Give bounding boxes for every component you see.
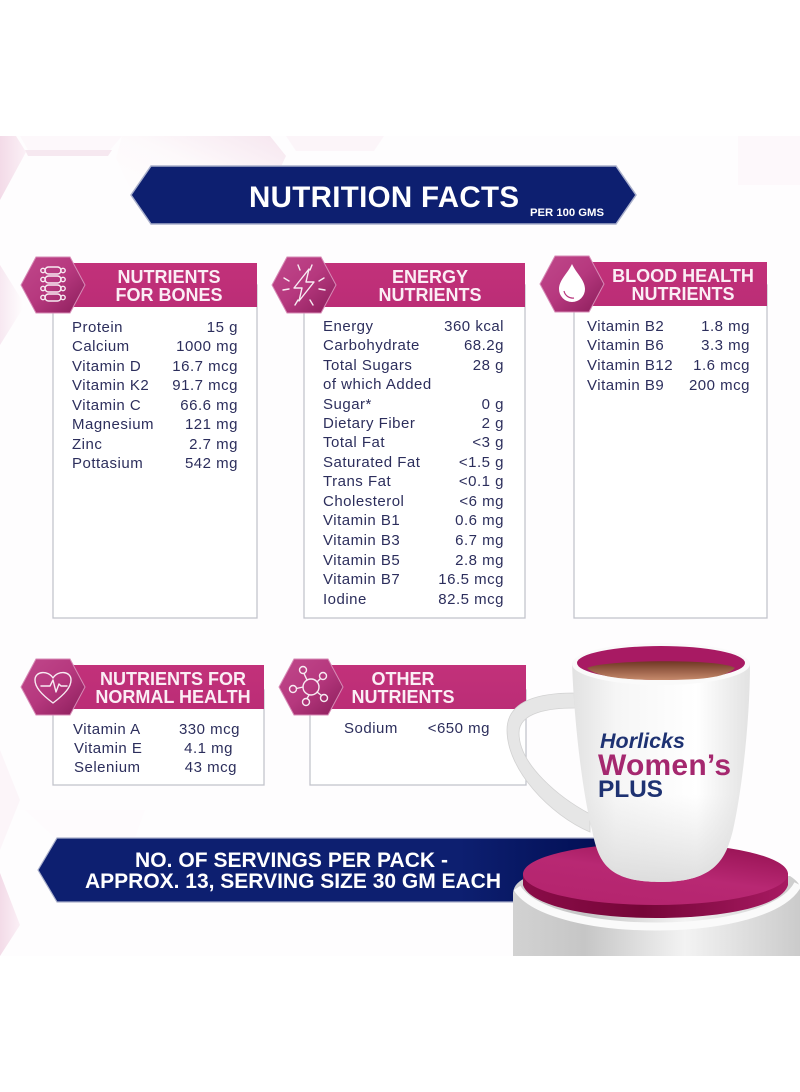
nutrient rows: normal health — [73, 721, 240, 776]
nutrient rows: blood health: 1.6 mcg — [693, 357, 750, 374]
nutrient rows: normal health: Vitamin A — [73, 721, 141, 738]
nutrient rows: normal health: 4.1 mg — [184, 740, 233, 757]
nutrient rows: blood health: 3.3 mg — [701, 337, 750, 354]
icon: spine — [21, 257, 85, 313]
nutrient rows: bones: 91.7 mcg — [172, 377, 238, 394]
heading: other nutrients: OTHER — [372, 669, 435, 689]
nutrient rows: blood health: Vitamin B2 — [587, 318, 664, 335]
nutrient rows: energy: Energy — [323, 318, 374, 335]
nutrient rows: energy: Trans Fat — [323, 473, 391, 490]
mug logo: PLUS — [598, 776, 663, 803]
nutrient rows: energy: 2.8 mg — [455, 552, 504, 569]
servings text: APPROX. 13, SERVING SIZE 30 GM EACH — [85, 870, 501, 893]
nutrient rows: energy: Vitamin B3 — [323, 532, 400, 549]
nutrient rows: energy: Vitamin B7 — [323, 571, 400, 588]
nutrient rows: energy: 2 g — [482, 415, 504, 432]
nutrient rows: energy: 16.5 mcg — [438, 571, 504, 588]
nutrient rows: energy: 0 g — [482, 396, 504, 413]
panel: other nutrients — [279, 659, 526, 785]
nutrient rows: other: <650 mg — [428, 720, 490, 737]
mug handle — [507, 693, 590, 832]
nutrient rows: energy: <1.5 g — [459, 454, 504, 471]
pedestal — [513, 843, 800, 956]
nutrient rows: energy: Vitamin B5 — [323, 552, 400, 569]
heading: nutrients for normal health: NUTRIENTS FOR — [100, 669, 246, 689]
panel: blood health nutrients — [540, 256, 767, 618]
mug logo: Horlicks — [600, 729, 685, 753]
nutrient rows: energy: 82.5 mcg — [438, 591, 504, 608]
nutrient rows: energy: Dietary Fiber — [323, 415, 415, 432]
nutrient rows: bones: Protein — [72, 319, 123, 336]
nutrient rows: energy: Cholesterol — [323, 493, 404, 510]
nutrient rows: bones: Zinc — [72, 436, 102, 453]
pink disc — [523, 843, 788, 918]
heading: other nutrients: NUTRIENTS — [352, 687, 454, 707]
panel: energy nutrients — [272, 257, 525, 618]
icon: blood drop — [540, 256, 604, 312]
nutrient rows: bones: Magnesium — [72, 416, 154, 433]
nutrient rows: energy: 28 g — [473, 357, 504, 374]
per 100 gms note: PER 100 GMS — [530, 207, 604, 219]
mug rim and coffee — [572, 643, 750, 685]
nutrient rows: energy: Total Fat — [323, 434, 385, 451]
nutrient rows: bones: 15 g — [207, 319, 238, 336]
heading: nutrients for bones: NUTRIENTS — [118, 267, 220, 287]
mug body — [572, 663, 750, 882]
title banner — [131, 166, 636, 224]
heading: blood health nutrients: NUTRIENTS — [632, 284, 734, 304]
nutrient rows: energy — [323, 318, 504, 608]
nutrient rows: bones: Pottasium — [72, 455, 143, 472]
heading: blood health nutrients: BLOOD HEALTH — [612, 266, 754, 286]
nutrient rows: energy: 0.6 mg — [455, 512, 504, 529]
nutrient rows: energy: Vitamin B1 — [323, 512, 400, 529]
nutrient rows: energy: of which Added — [323, 376, 432, 393]
nutrient rows: bones: 121 mg — [185, 416, 238, 433]
nutrient rows: bones: Vitamin K2 — [72, 377, 149, 394]
nutrient rows: bones: 542 mg — [185, 455, 238, 472]
heading: nutrients for bones: FOR BONES — [115, 285, 223, 305]
title text: NUTRITION FACTS — [249, 181, 519, 214]
nutrient rows: other: Sodium — [344, 720, 398, 737]
servings text: NO. OF SERVINGS PER PACK - — [135, 849, 448, 872]
nutrient rows: energy: <6 mg — [459, 493, 504, 510]
nutrient rows: bones: Calcium — [72, 338, 130, 355]
nutrient rows: blood health: Vitamin B12 — [587, 357, 673, 374]
nutrient rows: energy: Iodine — [323, 591, 367, 608]
nutrient rows: blood health: 1.8 mg — [701, 318, 750, 335]
icon: heart with pulse — [21, 659, 85, 715]
nutrient rows: blood health: Vitamin B6 — [587, 337, 664, 354]
nutrient rows: bones: 1000 mg — [176, 338, 238, 355]
panel: nutrients for normal health — [21, 659, 264, 785]
heading: energy nutrients: ENERGY — [392, 267, 468, 287]
icon: molecule — [279, 659, 343, 715]
panel: nutrients for bones — [21, 257, 257, 618]
heading: energy nutrients: NUTRIENTS — [378, 285, 482, 305]
nutrient rows: bones: 16.7 mcg — [172, 358, 238, 375]
nutrient rows: energy: Total Sugars — [323, 357, 412, 374]
servings banner — [38, 838, 600, 902]
mug logo — [598, 729, 731, 803]
nutrient rows: bones — [72, 319, 238, 472]
nutrient rows: energy: Sugar* — [323, 396, 372, 413]
nutrient rows: bones: Vitamin D — [72, 358, 141, 375]
background hexagon pattern — [0, 136, 800, 956]
nutrient rows: other — [344, 720, 490, 737]
nutrient rows: bones: 66.6 mg — [180, 397, 238, 414]
nutrient rows: energy: 360 kcal — [444, 318, 504, 335]
nutrient rows: normal health: 43 mcg — [185, 759, 237, 776]
nutrient rows: energy: 6.7 mg — [455, 532, 504, 549]
nutrient rows: energy: <3 g — [472, 434, 504, 451]
mug logo: Women’s — [598, 749, 731, 782]
nutrient rows: energy: Saturated Fat — [323, 454, 421, 471]
nutrient rows: bones: Vitamin C — [72, 397, 141, 414]
nutrient rows: energy: Carbohydrate — [323, 337, 420, 354]
nutrient rows: normal health: Selenium — [74, 759, 141, 776]
icon: lightning bolt — [272, 257, 336, 313]
nutrient rows: blood health — [587, 318, 750, 394]
heading: nutrients for normal health: NORMAL HEALTH — [95, 687, 251, 707]
nutrient rows: normal health: 330 mcg — [179, 721, 240, 738]
nutrient rows: normal health: Vitamin E — [74, 740, 142, 757]
nutrient rows: bones: 2.7 mg — [189, 436, 238, 453]
nutrient rows: blood health: Vitamin B9 — [587, 377, 664, 394]
nutrient rows: energy: 68.2g — [464, 337, 504, 354]
mug — [507, 643, 750, 882]
nutrient rows: energy: <0.1 g — [459, 473, 504, 490]
nutrient rows: blood health: 200 mcg — [689, 377, 750, 394]
